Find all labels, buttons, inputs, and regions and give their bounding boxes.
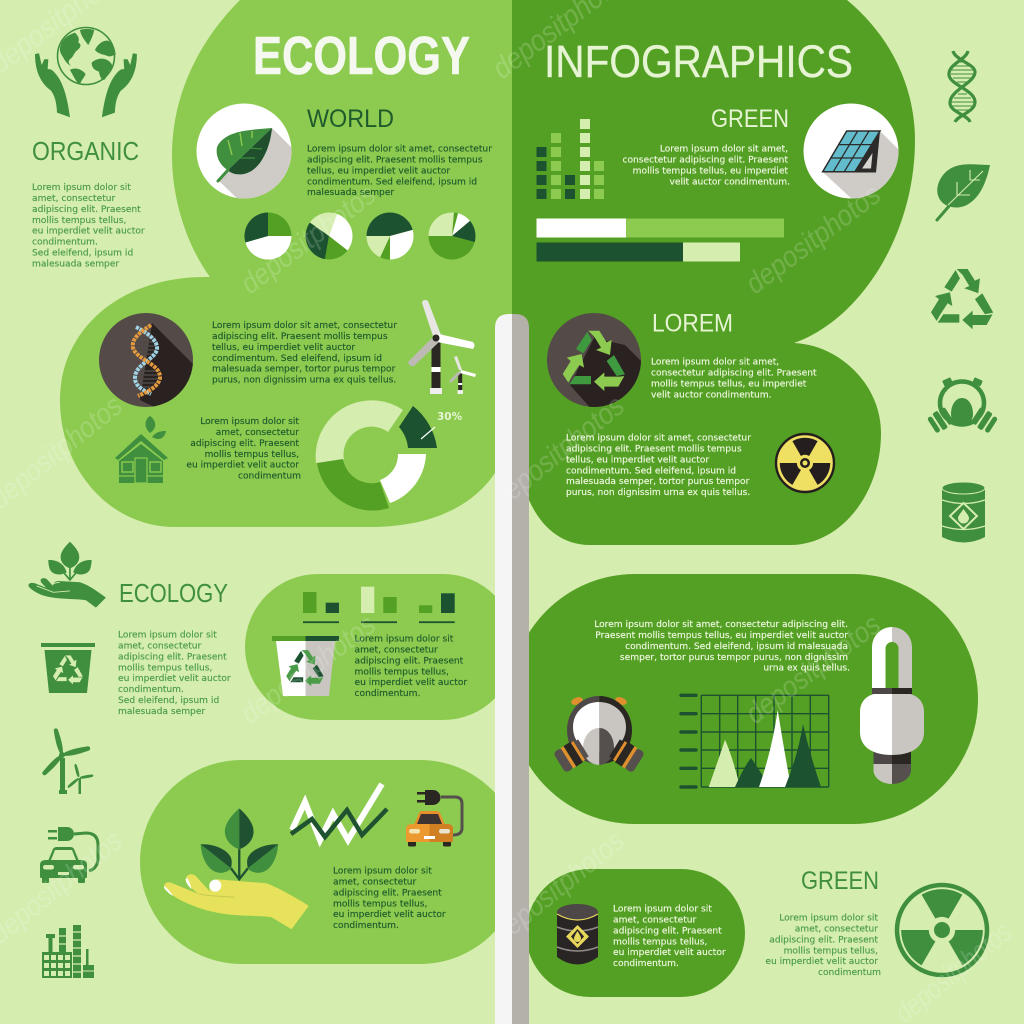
text: green: Lorem ipsum dolor sit amet, (660, 144, 788, 154)
watermarks: depositphotos (739, 608, 887, 731)
watermarks: depositphotos (234, 608, 382, 731)
icon: factory (42, 925, 94, 978)
text: lorem 1: mollis tempus tellus, eu imperdiet (651, 379, 807, 389)
icon: solar panel circle (804, 104, 898, 198)
text: organic: condimentum. (32, 238, 98, 248)
text: lorem 2: condimentum. Sed eleifend, ipsum id (566, 466, 736, 476)
text: world: Lorem ipsum dolor sit amet, consectetur (307, 144, 492, 154)
text: house: adipiscing elit. Praesent (190, 439, 299, 449)
icon: barrel (942, 482, 985, 542)
icon: oil barrel (557, 904, 598, 964)
text: lorem 2: adipiscing elit. Praesent mollis tempus (566, 444, 742, 454)
text: bin: amet, consectetur (354, 645, 438, 655)
text: ecology: amet, consectetur (118, 641, 202, 651)
text: hand: mollis tempus tellus, (333, 899, 427, 909)
icon: bin (41, 643, 95, 693)
text: ecology: malesuada semper (118, 707, 205, 717)
text: ecology: mollis tempus tellus, (118, 663, 212, 673)
text: lorem 1: consectetur adipiscing elit. Praesent (651, 368, 817, 378)
heading: WORLD: WORLD (307, 105, 394, 133)
panel: hand pill (140, 760, 522, 964)
progress bars (536, 218, 784, 262)
left column icons (28, 542, 231, 978)
watermarks: depositphotos (234, 178, 382, 301)
small bar charts (303, 587, 455, 623)
icon: wind turbines (41, 728, 94, 794)
heading: ECOLOGY small: ECOLOGY (119, 578, 228, 608)
text: world: condimentum. Sed eleifend, ipsum id (307, 177, 477, 187)
text: dna: Lorem ipsum dolor sit amet, consectetur (212, 321, 397, 331)
text: green bottom: mollis tempus tellus, (784, 946, 878, 956)
icon: DNA circle (99, 313, 193, 407)
text: hand: amet, consectetur (333, 877, 417, 887)
text: organic: malesuada semper (32, 260, 119, 270)
callout: 30% (421, 411, 463, 439)
panel: bin pill (245, 574, 516, 720)
panel: right main blob (512, 0, 915, 545)
heading: GREEN top: GREEN (711, 105, 789, 133)
zigzag line chart (291, 784, 387, 840)
text: dna: adipiscing elit. Praesent mollis tempus (212, 332, 388, 342)
text: house: eu imperdiet velit auctor (186, 461, 299, 471)
text: ecology: Lorem ipsum dolor sit (118, 630, 217, 640)
pie 4 (428, 213, 476, 260)
pie 2 (306, 213, 353, 259)
text: green bottom: Lorem ipsum dolor sit (779, 914, 878, 924)
text: mask panel: Lorem ipsum dolor sit amet, consectetur adipiscing elit. (594, 620, 848, 630)
text: barrel: adipiscing elit. Praesent (613, 926, 722, 936)
icon: electric car (40, 827, 98, 883)
text: bin: mollis tempus tellus, (354, 667, 449, 677)
text: organic: adipiscing elit. Praesent (32, 205, 141, 215)
text: green bottom: condimentum (818, 968, 881, 978)
pie 1 (244, 212, 292, 260)
grid area chart (681, 695, 829, 787)
text: house: amet, consectetur (216, 428, 299, 438)
text: organic: Sed eleifend, ipsum id (32, 249, 133, 259)
text: ecology: Sed eleifend, ipsum id (118, 696, 219, 706)
text: organic: Lorem ipsum dolor sit (32, 183, 131, 193)
text: ecology: eu imperdiet velit auctor (118, 674, 231, 684)
text: bin: adipiscing elit. Praesent (354, 656, 464, 666)
icon: radiation yellow (776, 434, 834, 492)
pie charts (244, 212, 476, 260)
text: house: mollis tempus tellus, (205, 450, 299, 460)
text: barrel: mollis tempus tellus, (613, 937, 707, 947)
text: mask panel: Praesent mollis tempus tellus, eu imperdiet velit auctor (595, 631, 848, 641)
text: lorem 1: velit auctor condimentum. (651, 390, 772, 400)
panel: mask pill (510, 574, 978, 824)
title: ECOLOGY: ECOLOGY (253, 26, 470, 86)
text: green bottom: eu imperdiet velit auctor (765, 957, 878, 967)
text: lorem 2: malesuada semper, tortor purus tempor (566, 477, 750, 487)
icon: gas mask coloured (553, 696, 645, 773)
text: lorem 2: tellus, eu imperdiet velit auctor (566, 455, 709, 465)
text: house: condimentum (238, 472, 301, 482)
icon: wind turbines (408, 300, 476, 394)
icon: globe in hands (35, 28, 137, 117)
heading: ORGANIC: ORGANIC (32, 136, 139, 166)
panel: barrel pill (526, 869, 745, 997)
text: green: mollis tempus tellus, eu imperdiet (633, 166, 788, 176)
text: mask panel: condimentum. Sed eleifend, ipsum id malesuada (625, 642, 848, 652)
text: green bottom: amet, consectetur (795, 924, 878, 934)
text: hand: Lorem ipsum dolor sit (333, 866, 432, 876)
donut chart (316, 400, 463, 511)
icon: gas mask (926, 377, 999, 434)
text: hand: eu imperdiet velit auctor (333, 910, 446, 920)
icon: leaf circle (196, 104, 292, 198)
text: bin: Lorem ipsum dolor sit (354, 634, 454, 644)
icon: recycle bin coloured (272, 636, 339, 696)
text: hand: condimentum. (333, 921, 399, 931)
icon: leaf (937, 164, 990, 220)
text: green: velit auctor condimentum. (669, 177, 790, 187)
equalizer chart (536, 119, 604, 199)
watermarks: depositphotos (486, 389, 631, 515)
text: dna: purus, non dignissim urna ex quis tellus. (212, 376, 396, 386)
text: lorem 2: purus, non dignissim urna ex quis tellus. (566, 488, 750, 498)
text: barrel: condimentum. (613, 959, 679, 969)
panel: left main blob (60, 0, 512, 527)
text: organic: amet, consectetur (32, 194, 116, 204)
text: bin: eu imperdiet velit auctor (354, 678, 467, 688)
heading: GREEN bottom: GREEN (801, 867, 879, 895)
text: house: Lorem ipsum dolor sit (200, 417, 299, 427)
watermarks: depositphotos (739, 178, 887, 301)
watermarks: depositphotos (486, 824, 631, 950)
text: organic: eu imperdiet velit auctor (32, 227, 145, 237)
text: world: malesuada semper (307, 188, 394, 198)
text: organic: mollis tempus tellus, (32, 216, 126, 226)
text: dna: malesuada semper, tortor purus tempor (212, 365, 396, 375)
text: lorem 1: Lorem ipsum dolor sit amet, (651, 358, 779, 368)
text: bin: condimentum. (354, 689, 420, 699)
text: world: adipiscing elit. Praesent mollis tempus (307, 155, 483, 165)
text: green: consectetur adipiscing elit. Praesent (622, 155, 788, 165)
icon: recycle circle (547, 313, 641, 407)
text: ecology: adipiscing elit. Praesent (118, 652, 227, 662)
text: ecology: condimentum. (118, 685, 184, 695)
text: barrel: eu imperdiet velit auctor (613, 948, 726, 958)
icon: energy saving bulb (860, 627, 924, 784)
icon: recycle (931, 269, 993, 329)
text: dna: condimentum. Sed eleifend, ipsum id (212, 354, 382, 364)
text: barrel: amet, consectetur (613, 915, 697, 925)
icon: eco house (115, 416, 168, 483)
title: INFOGRAPHICS: INFOGRAPHICS (544, 36, 853, 87)
text: dna: tellus, eu imperdiet velit auctor (212, 343, 355, 353)
icon: orange electric car (406, 790, 462, 846)
right column icons (926, 51, 999, 542)
heading: LOREM: LOREM (652, 310, 733, 338)
icon: plant in hand (28, 542, 106, 608)
icon: radiation (896, 885, 988, 975)
text: barrel: Lorem ipsum dolor sit (613, 904, 712, 914)
text: green bottom: adipiscing elit. Praesent (769, 935, 878, 945)
text: hand: adipiscing elit. Praesent (333, 888, 442, 898)
text: world: tellus, eu imperdiet velit auctor (307, 166, 450, 176)
callout: 30%: 30% (437, 411, 463, 423)
icon: dna (949, 51, 975, 122)
central stem (495, 314, 529, 1024)
pie 3 (366, 212, 414, 260)
text: mask panel: urna ex quis tellus. (763, 664, 850, 674)
text: mask panel: semper, tortor purus tempor purus, non dignissim (620, 653, 848, 663)
text: lorem 2: Lorem ipsum dolor sit amet, consectetur (566, 434, 751, 444)
icon: plant in yellow hand (164, 808, 309, 929)
